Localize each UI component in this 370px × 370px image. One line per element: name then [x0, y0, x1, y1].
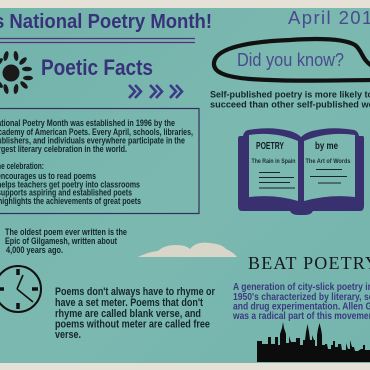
book page lines [259, 170, 347, 188]
book left page text: POETRY [256, 141, 284, 152]
text block: oldest poem: 4,000 years ago. [6, 245, 63, 255]
icon: clock [0, 266, 41, 312]
text block: poems: verse. [55, 329, 81, 341]
icon: book: The Art of Words [306, 158, 351, 165]
text block: beat poetry [232, 282, 370, 322]
text block: oldest poem: Epic of Gilgamesh, written about [5, 236, 117, 246]
text block: poems: poems without meter are called free [55, 318, 210, 330]
text block: intro: helps teachers get poetry into classrooms [0, 180, 140, 190]
title: s National Poetry Month! [0, 10, 212, 33]
text block: poems: rhyme are called blank verse, and [55, 308, 201, 320]
text block: intro: publishers, and individuals everywhere participate in the [0, 136, 185, 146]
text block: poems: have a set meter. Poems that don't [55, 297, 203, 309]
chevrons [129, 85, 182, 98]
text block: intro: supports aspiring and established poets [0, 188, 132, 198]
text block: intro [0, 118, 193, 206]
icon: sun [0, 51, 33, 94]
text block: poems [55, 286, 215, 341]
text block: intro: Academy of American Poets. Every April, schools, libraries, [0, 127, 193, 137]
panel: facts box [0, 108, 199, 214]
heading: poetic facts: Poetic Facts [41, 55, 153, 80]
text block: poems: Poems don't always have to rhyme or [55, 286, 215, 298]
cloud [138, 243, 237, 257]
icon: book [238, 128, 364, 215]
bubble text: Did you know? [237, 50, 344, 70]
top paper band [0, 0, 370, 8]
city skyline [257, 322, 370, 362]
text block: intro: encourages us to read poems [0, 171, 96, 181]
bottom paper band [0, 363, 370, 370]
text block: oldest poem: The oldest poem ever written is the [5, 227, 127, 237]
icon: book: The Rain in Spain [252, 158, 296, 165]
text block: did you know fact [210, 90, 370, 110]
title double rule [0, 38, 195, 42]
text block: intro: highlights the achievements of great poets [0, 196, 141, 206]
speech bubble [214, 39, 370, 81]
book right page text: by me [315, 141, 338, 152]
text block: oldest poem [5, 227, 127, 255]
